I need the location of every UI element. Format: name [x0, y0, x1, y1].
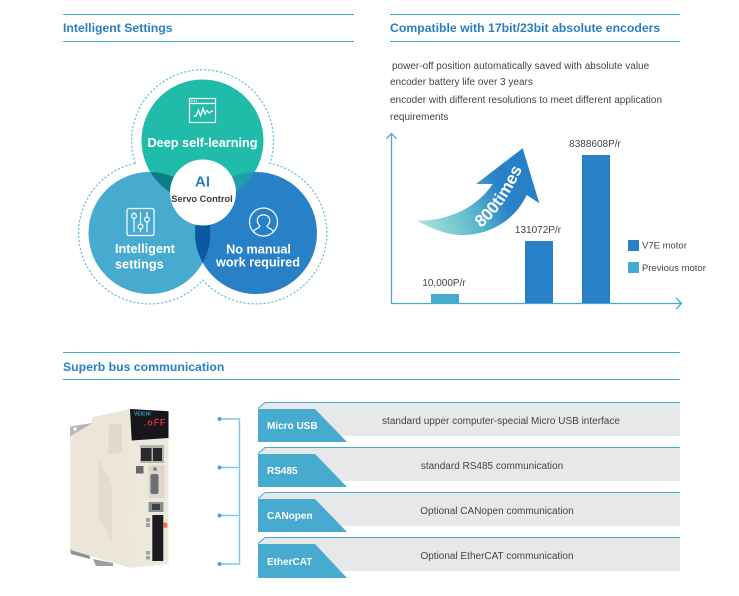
- center label: [171, 174, 233, 204]
- encoder description text: power-off position automatically saved with absolute value: [392, 61, 650, 72]
- row: EtherCAT: EtherCAT: [267, 557, 312, 568]
- usb port: [148, 502, 164, 512]
- arrow: growth: [417, 148, 539, 235]
- overlap: top and right: [232, 172, 254, 192]
- axes: [386, 134, 682, 309]
- heading: Intelligent Settings: Intelligent Settings: [63, 21, 173, 35]
- center circle: [170, 160, 236, 226]
- label: deep self-learning: Deep self-learning: [148, 136, 258, 150]
- label: intelligent settings: settings: [115, 258, 164, 272]
- bar: 131072P/r: [525, 241, 553, 303]
- icon: sliders: [127, 208, 154, 236]
- servo drive product image: .oFF: [144, 418, 166, 428]
- terminal connector: [152, 515, 163, 561]
- heading: Superb bus communication: Superb bus communication: [63, 360, 224, 374]
- bar: 8388608P/r: [582, 155, 610, 303]
- bar: previous 10,000P/r: [431, 294, 459, 303]
- bar chart: encoder resolution: [386, 132, 706, 310]
- icon: user: [250, 208, 278, 236]
- encoder description text: requirements: [390, 112, 448, 123]
- venn diagram: AI servo control: [79, 70, 327, 304]
- circle: no manual work required: [195, 172, 317, 294]
- center label: AI: [195, 174, 210, 190]
- legend: [628, 240, 706, 274]
- center label: Servo Control: [171, 194, 233, 204]
- row: RS485: RS485: [267, 466, 298, 477]
- row: RS485: [258, 448, 680, 487]
- heading: Compatible with encoders: Compatible with 17bit/23bit absolute encoders: [390, 21, 660, 35]
- encoder description text: encoder with different resolutions to meet different application: [390, 95, 662, 106]
- row: EtherCAT: [258, 538, 680, 578]
- mounting bracket: [70, 423, 92, 437]
- row: Micro USB: [258, 402, 680, 442]
- arrow label: 800times: 800times: [475, 166, 521, 226]
- bracket connector: [218, 417, 240, 566]
- circle: deep self-learning: [142, 80, 264, 202]
- serial port: [148, 465, 164, 498]
- front panel: [130, 409, 168, 568]
- label: intelligent settings: [115, 242, 176, 272]
- servo drive product image: [70, 409, 168, 568]
- icon: waveform window: [190, 98, 216, 122]
- label: no manual work required: No manual: [226, 242, 291, 256]
- encoder description text: [390, 61, 662, 123]
- side of housing: [70, 409, 131, 568]
- value labels: 131072P/r: [515, 225, 562, 236]
- value labels: [422, 139, 622, 289]
- label: intelligent settings: Intelligent: [115, 242, 176, 256]
- value labels: 10,000P/r: [422, 278, 466, 289]
- ethernet ports: [140, 445, 164, 463]
- legend: V7E motor: [642, 240, 687, 252]
- row: RS485: standard RS485 communication: [421, 461, 563, 472]
- row: CANopen: [258, 492, 680, 532]
- overlap: top and left: [150, 172, 174, 192]
- legend: Previous motor: [642, 263, 706, 274]
- display: [130, 409, 168, 440]
- overlap: left and right: [195, 224, 210, 263]
- encoder description text: encoder battery life over 3 years: [390, 77, 533, 88]
- status indicators: [146, 518, 150, 560]
- label: no manual work required: [215, 242, 300, 270]
- value labels: 8388608P/r: [569, 139, 622, 150]
- side vents: [108, 423, 122, 454]
- label: no manual work required: work required: [215, 256, 300, 270]
- dashed outline: [79, 70, 327, 304]
- row: Micro USB: Micro USB: [267, 421, 318, 432]
- row: CANopen: Optional CANopen communication: [420, 506, 574, 517]
- QR code: [136, 466, 144, 474]
- servo drive product image: VEICHI: [134, 412, 151, 418]
- row: EtherCAT: Optional EtherCAT communication: [420, 551, 574, 562]
- circle: intelligent settings: [88, 172, 210, 294]
- row: Micro USB: standard upper computer-special Micro USB interface: [382, 416, 620, 427]
- row: CANopen: CANopen: [267, 511, 313, 522]
